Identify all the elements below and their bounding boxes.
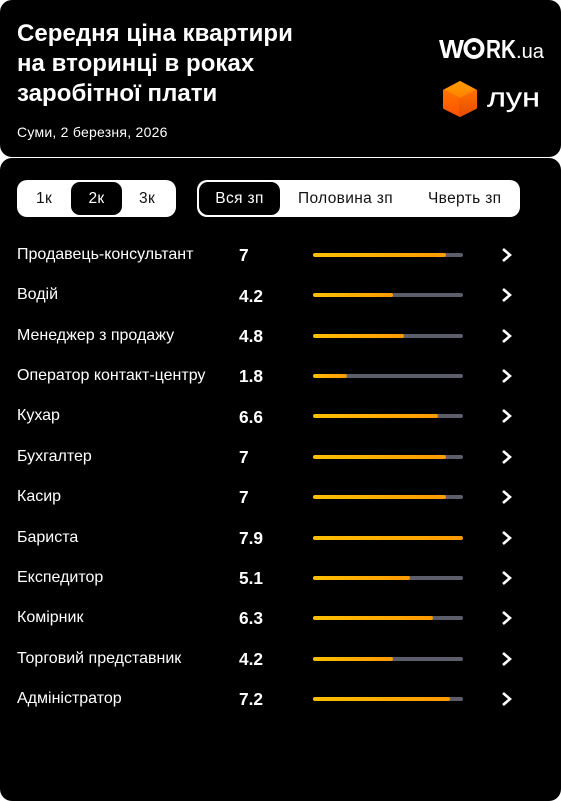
row: Торговий представник: Торговий представник: [17, 650, 181, 666]
panel: header: [0, 0, 561, 156]
row: Комірник: Комірник: [17, 609, 83, 626]
row: Касир: 7: [239, 487, 249, 507]
row: Кухар: Кухар: [17, 407, 60, 424]
row: Бариста: [17, 528, 512, 548]
row: Експедитор: 5.1: [239, 568, 263, 588]
option: full salary selected: Вся зп: [215, 190, 264, 207]
option: 3к: 3к: [139, 190, 155, 207]
row: Бариста: 7.9: [239, 528, 263, 548]
row: Водій: [17, 286, 512, 306]
row: Торговий представник: [17, 649, 512, 669]
option: full salary selected: [199, 182, 280, 215]
row: Бариста: Бариста: [17, 528, 78, 546]
control: room count selector: [17, 180, 176, 217]
row: Адміністратор: 7.2: [239, 689, 263, 709]
row: Оператор контакт-центру: [17, 366, 512, 386]
row: Комірник: [17, 608, 512, 628]
title: Середня ціна квартири: [17, 20, 293, 46]
title: заробітної плати: [17, 80, 217, 106]
row: Продавець-консультант: Продавець-консультант: [17, 246, 193, 263]
row: Продавець-консультант: [17, 245, 512, 265]
row: Менеджер з продажу: [17, 326, 512, 346]
control: salary share selector: [197, 180, 520, 217]
row: Кухар: [17, 407, 512, 427]
logo: Work.ua: [439, 35, 545, 63]
option: 1к: 1к: [36, 190, 52, 207]
row: Комірник: 6.3: [239, 608, 263, 628]
row: Бухгалтер: 7: [239, 447, 249, 467]
logo: LUN: лун: [487, 82, 540, 112]
row: Менеджер з продажу: Менеджер з продажу: [17, 327, 174, 344]
logo: LUN: [443, 81, 540, 117]
row: Бухгалтер: [17, 447, 512, 467]
row: Продавець-консультант: 7: [239, 245, 249, 265]
row: Водій: 4.2: [239, 286, 263, 306]
row: Торговий представник: 4.2: [239, 649, 263, 669]
row: Оператор контакт-центру: Оператор контакт-центру: [17, 367, 205, 384]
row: Адміністратор: [17, 689, 512, 709]
row: Менеджер з продажу: 4.8: [239, 326, 263, 346]
row: Бухгалтер: Бухгалтер: [17, 448, 92, 465]
option: half salary: Половина зп: [298, 190, 393, 207]
row: Оператор контакт-центру: 1.8: [239, 366, 263, 386]
option: 2к selected: [71, 182, 122, 215]
subtitle: city and date: Суми, 2 березня, 2026: [17, 124, 168, 140]
row: Експедитор: Експедитор: [17, 569, 103, 586]
row: Касир: [17, 487, 512, 507]
title: на вторинці в роках: [17, 50, 254, 76]
title: [17, 20, 293, 106]
row: Касир: Касир: [17, 488, 61, 505]
row: Експедитор: [17, 568, 512, 588]
logo: Work.ua: .ua: [516, 41, 545, 63]
row: Адміністратор: Адміністратор: [17, 690, 122, 707]
row: Водій: Водій: [17, 286, 58, 303]
row: Кухар: 6.6: [239, 407, 263, 427]
option: 2к selected: 2к: [88, 190, 105, 207]
option: quarter salary: Чверть зп: [428, 190, 501, 207]
